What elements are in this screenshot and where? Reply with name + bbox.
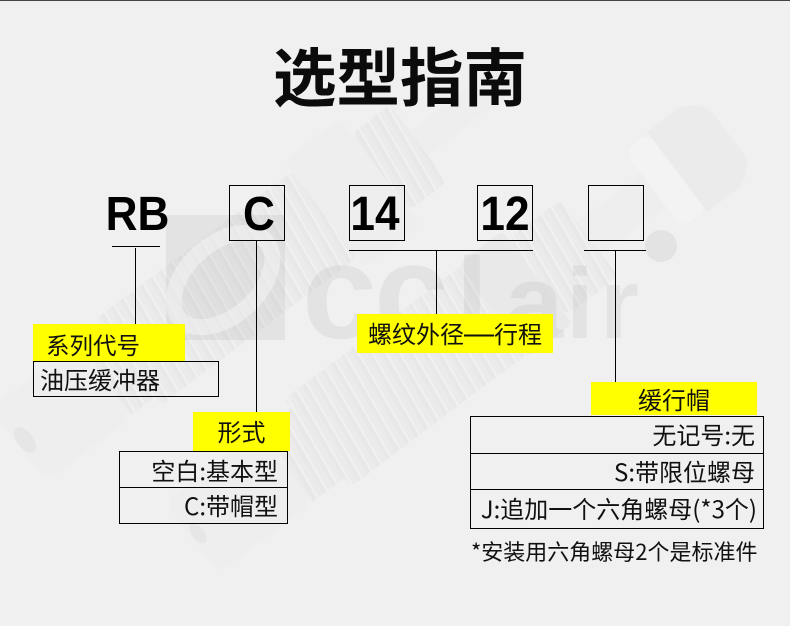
title: 选型指南	[273, 28, 527, 120]
option: J: J:追加一个六角螺母(*3个)	[481, 490, 757, 525]
label: series code: 系列代号	[46, 327, 140, 361]
option: C: C:带帽型	[184, 487, 278, 522]
connector: cap	[584, 250, 646, 382]
option: S: S:带限位螺母	[614, 453, 755, 488]
code box: 12	[477, 185, 533, 241]
panel: series value: 油压缓冲器	[40, 361, 160, 396]
panel: form options	[119, 451, 288, 524]
connector: RB	[112, 246, 160, 324]
code number: 14: 14	[350, 188, 400, 241]
footnote: *安装用六角螺母2个是标准件	[471, 535, 758, 567]
code box: C	[229, 185, 285, 241]
code letter: C: C	[243, 188, 275, 241]
background watermark: shock absorbers and logo: l	[456, 235, 488, 363]
label: form	[193, 412, 290, 451]
label: cap	[591, 382, 757, 415]
label: series code	[33, 324, 185, 361]
top edge line	[0, 0, 790, 1]
background watermark: shock absorbers and logo: c	[374, 216, 449, 367]
code number: 12: 12	[480, 188, 530, 241]
panel: series value	[33, 361, 219, 397]
option: blank: 空白:基本型	[151, 452, 278, 487]
option: none: 无记号:无	[652, 416, 755, 451]
option: none	[471, 417, 763, 454]
label: thread and stroke: 螺纹外径—行程	[368, 315, 542, 350]
code box: empty	[588, 185, 644, 241]
panel: cap options	[470, 416, 764, 529]
background watermark: shock absorbers and logo: r	[600, 248, 639, 360]
connector: 14 and 12	[349, 250, 533, 314]
option: S	[471, 454, 763, 490]
background watermark: shock absorbers and logo: i	[566, 248, 594, 360]
label: form: 形式	[218, 413, 266, 448]
code box: 14	[349, 185, 405, 241]
connector: C	[256, 241, 257, 412]
background watermark: shock absorbers and logo: a	[505, 244, 565, 361]
label: cap: 缓行帽	[638, 381, 710, 416]
background watermark: shock absorbers and logo: c	[302, 216, 377, 367]
code: RB: RB	[106, 188, 169, 241]
